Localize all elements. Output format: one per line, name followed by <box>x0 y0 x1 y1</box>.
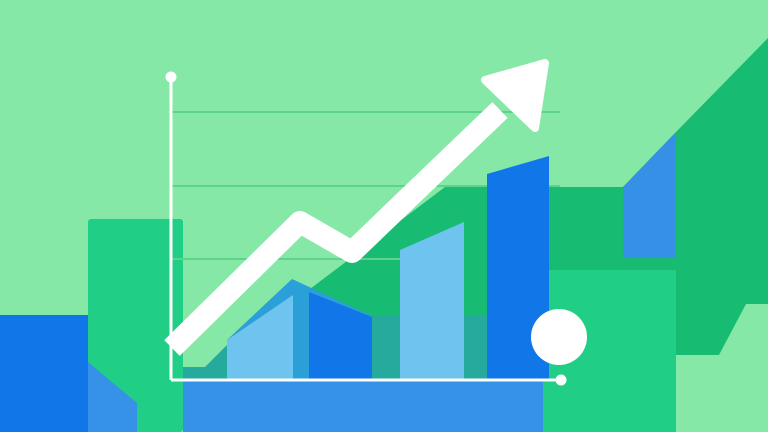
trend arrow <box>172 63 545 348</box>
grid lines <box>171 112 560 259</box>
bar 4 <box>487 156 549 380</box>
dark green background shape <box>183 38 768 432</box>
teal band <box>183 315 543 380</box>
green column left <box>88 219 183 432</box>
axes <box>167 73 565 384</box>
bar 2 <box>309 292 372 380</box>
white circle marker <box>531 309 587 365</box>
bar roof shadow <box>227 279 372 380</box>
blue block right <box>623 132 676 258</box>
bar 1 <box>227 295 293 380</box>
bar 3 <box>400 222 464 380</box>
medium green block right <box>543 270 676 432</box>
light green step shape <box>676 304 768 432</box>
bottom blue base <box>183 380 543 432</box>
blue block left <box>0 315 88 432</box>
light blue slanted block <box>88 362 137 432</box>
